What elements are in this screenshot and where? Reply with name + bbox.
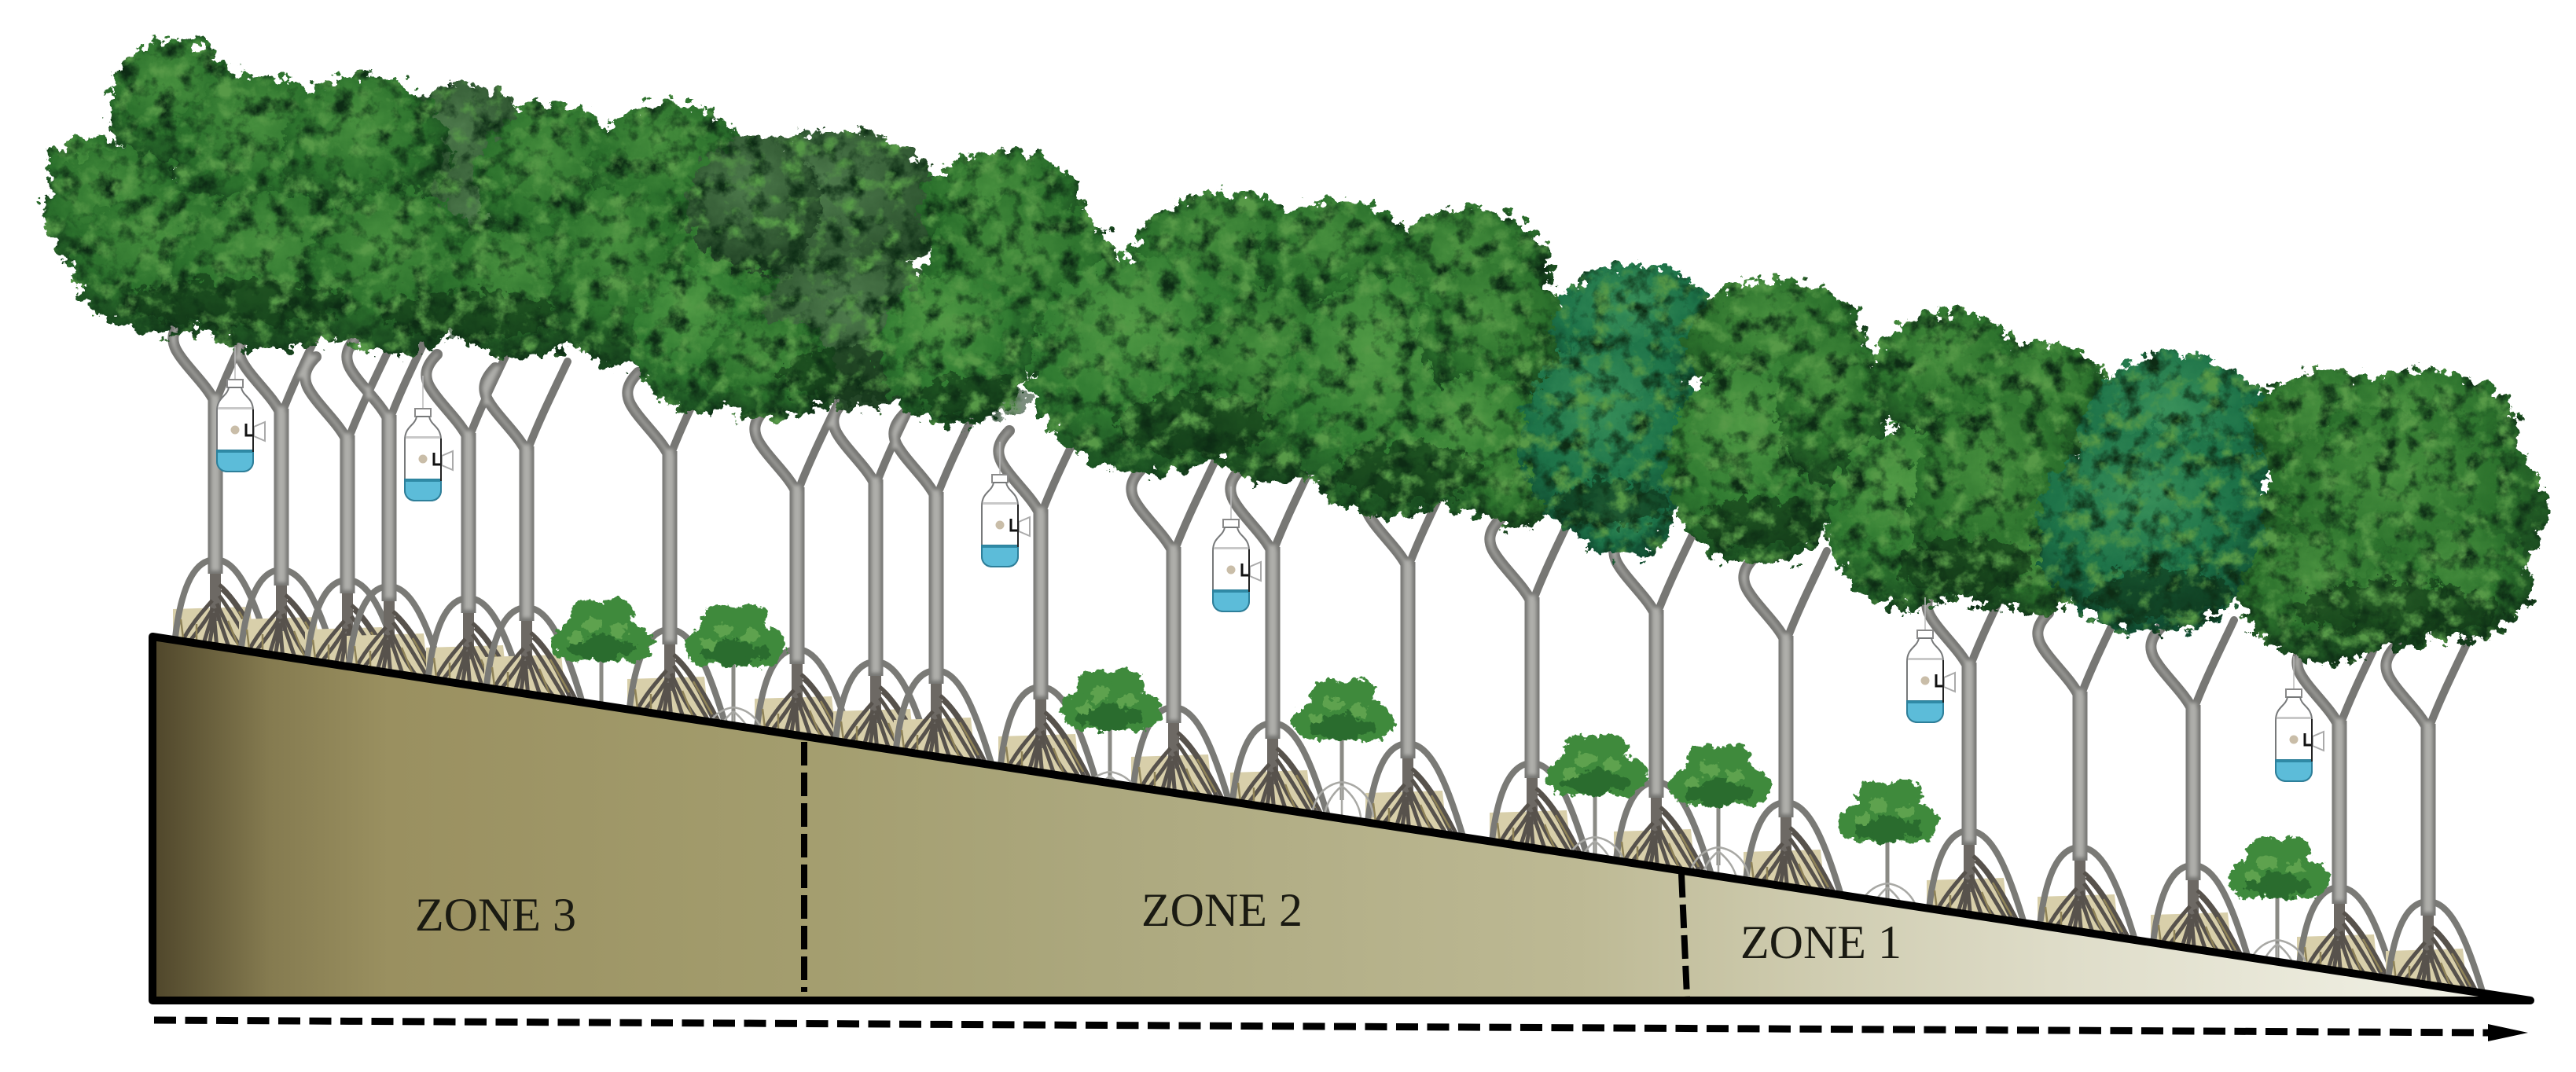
soil wedge bbox=[153, 637, 2530, 1000]
canopy: zone 2 first cluster bbox=[876, 149, 1120, 424]
canopy: zone 2 third cluster bbox=[1285, 208, 1568, 529]
tree trunks with prop roots bbox=[173, 312, 2483, 996]
canopy: zone 1 second cluster bbox=[1828, 310, 2111, 613]
canopy: far right cluster bbox=[2240, 369, 2547, 663]
sapling crowns bbox=[553, 599, 2329, 900]
mangrove canopy bbox=[43, 39, 2547, 663]
bottle 5 bbox=[1907, 597, 1955, 722]
label: zone 3: ZONE 3 bbox=[415, 889, 576, 941]
label: zone 2: ZONE 2 bbox=[1141, 884, 1303, 936]
canopy: teal tree bbox=[1521, 263, 1718, 558]
dashed direction arrow bbox=[154, 1020, 2528, 1041]
canopy: zone 1 first cluster bbox=[1666, 279, 1887, 566]
sapling stems and young roots bbox=[571, 648, 2309, 975]
trunks and forks bbox=[173, 312, 2469, 916]
sampling bottles bbox=[217, 347, 2324, 781]
prop roots bbox=[173, 560, 2483, 996]
bottle 4 bbox=[1213, 486, 1261, 611]
zone boundary 2-1 bbox=[1681, 874, 1687, 997]
bottle 2 bbox=[405, 376, 453, 501]
bottle 3 bbox=[982, 442, 1030, 567]
canopy: zone 3 middle cluster bbox=[550, 102, 955, 420]
canopy: teal tree right bbox=[2036, 354, 2276, 633]
canopy: zone 2 second cluster bbox=[1030, 193, 1419, 483]
canopy: zone 3 left cluster bbox=[43, 39, 625, 358]
label: zone 1: ZONE 1 bbox=[1740, 916, 1902, 968]
zone boundary 3-2 bbox=[801, 742, 807, 992]
bottle 1 bbox=[217, 347, 265, 472]
bottle 6 bbox=[2276, 656, 2324, 781]
